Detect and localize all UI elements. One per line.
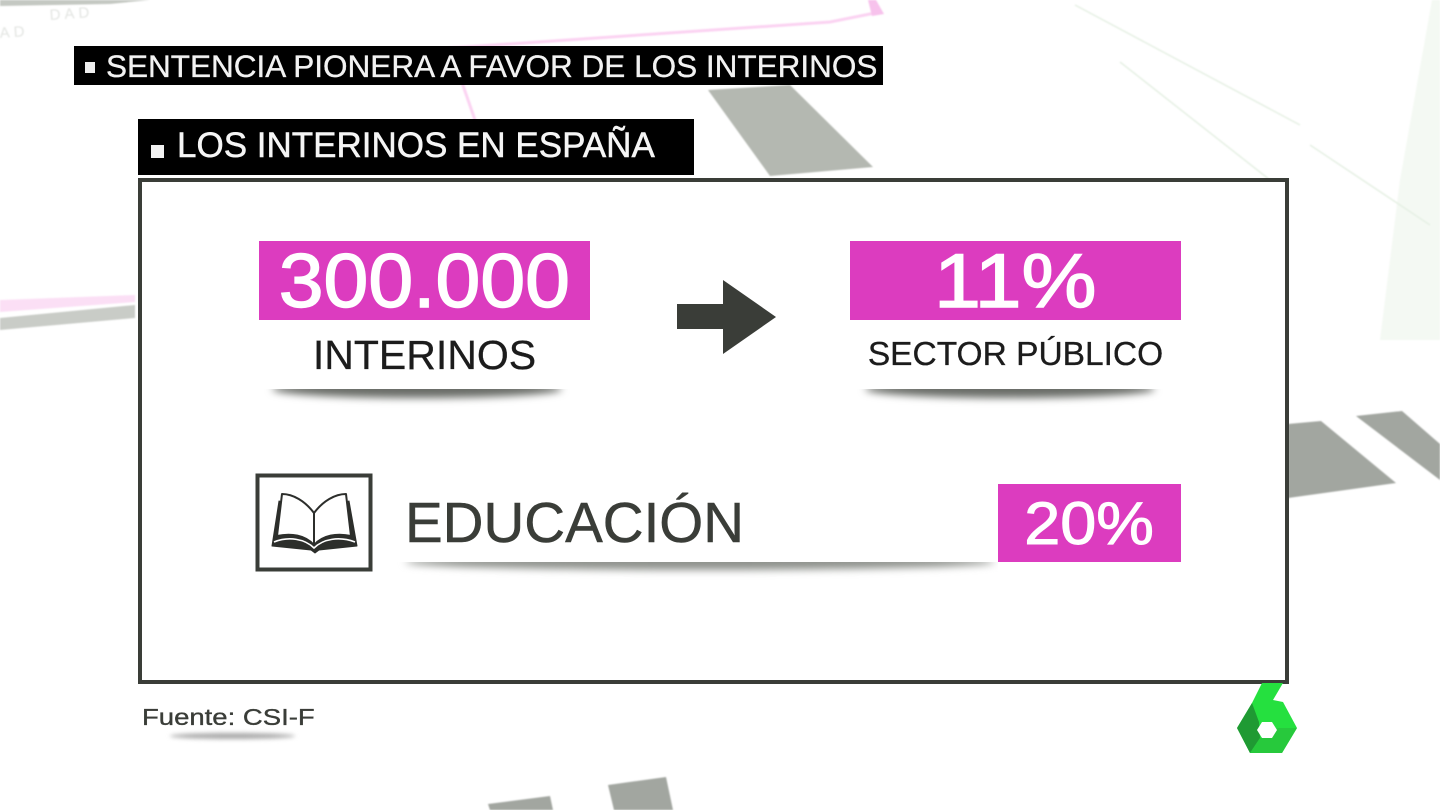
education value — [998, 484, 1181, 562]
headline text: SENTENCIA PIONERA A FAVOR DE LOS INTERINOS — [106, 48, 877, 84]
education value: 20% — [1025, 490, 1154, 557]
icon: book in frame — [256, 474, 372, 572]
subtitle bar — [138, 119, 694, 175]
shadow under source — [170, 733, 295, 739]
stat: 11% value — [850, 241, 1181, 320]
shadow under interinos — [269, 389, 565, 404]
headline bullet — [85, 62, 95, 73]
stat: sector publico label: SECTOR PÚBLICO — [868, 336, 1163, 373]
education bar fade — [373, 484, 998, 562]
subtitle bullet — [151, 145, 164, 158]
shadow under education — [404, 562, 996, 576]
background: faded document shapes: DAD — [49, 4, 94, 24]
icon: arrow — [677, 280, 776, 354]
subtitle text: LOS INTERINOS EN ESPAÑA — [177, 126, 655, 165]
shadow under sector publico — [862, 389, 1158, 404]
panel: main frame — [138, 178, 1289, 684]
logo: la Sexta — [1237, 683, 1297, 753]
education label: EDUCACIÓN — [405, 491, 744, 554]
source: Fuente: CSI-F — [142, 704, 315, 730]
headline bar — [74, 46, 883, 85]
stat: 11% value: 11% — [934, 239, 1097, 324]
stat: interinos label: INTERINOS — [313, 332, 536, 378]
row: education — [405, 484, 1181, 562]
stat: 300.000 value: 300.000 — [279, 239, 570, 324]
